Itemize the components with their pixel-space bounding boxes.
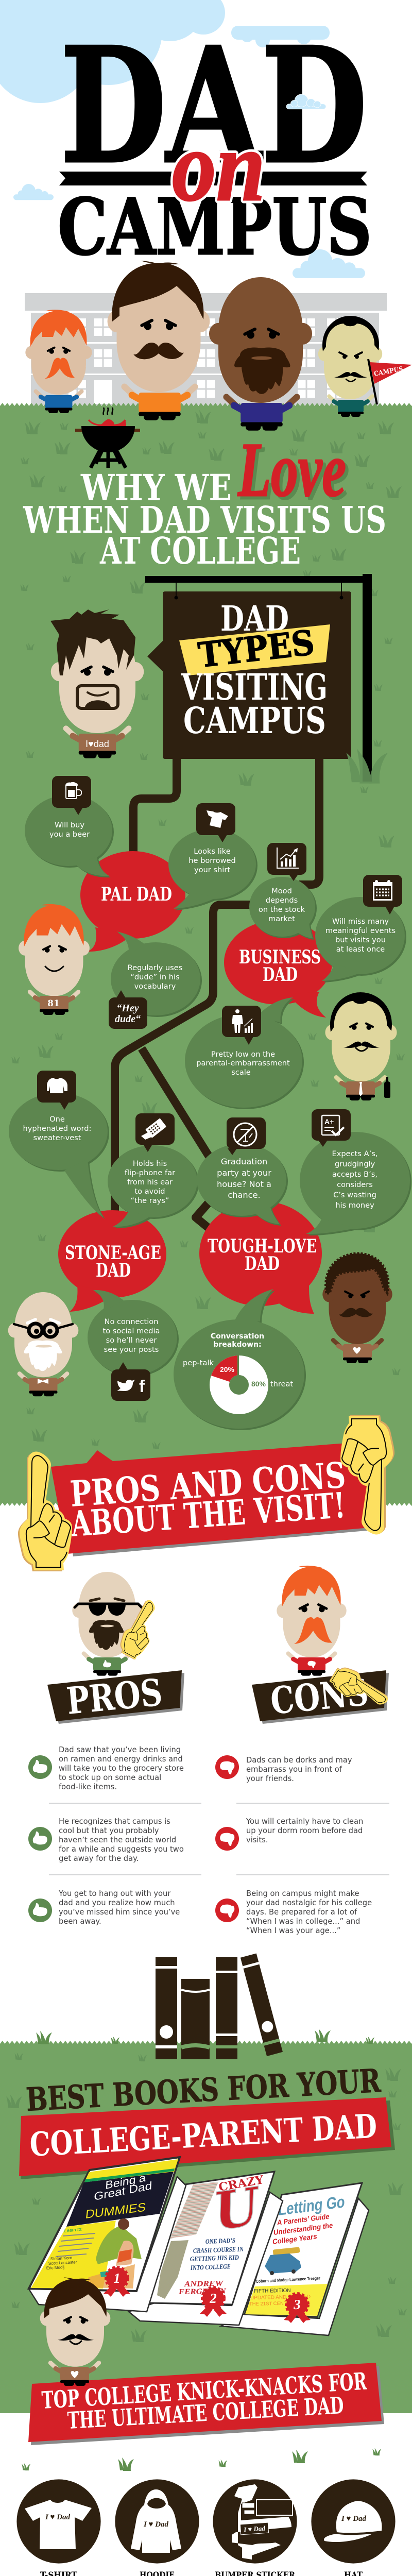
bubble: pretty low on the embarrassment scale: parental-embarrassment [196, 1059, 290, 1067]
book 1: being a great dad: Great Dad [94, 2179, 152, 2203]
pro item 2: cool but that you probably [59, 1826, 159, 1835]
bubble: will miss many meaningful events: Will miss many [332, 917, 389, 926]
panel: business dad: DAD [263, 964, 298, 986]
icon: graded paper: A+ [324, 1117, 334, 1126]
script love: Love [237, 427, 346, 513]
book covers [29, 2157, 369, 2335]
donut chart: 20% pep-talk, 80% threat [183, 1355, 293, 1404]
con item 3: “When I was in college...” and [246, 1917, 360, 1926]
bubble: conversation breakdown [174, 1289, 306, 1430]
dad: orange hair [25, 310, 92, 413]
book 2: crazy u [129, 2172, 283, 2325]
con item 3 [215, 1889, 372, 1935]
bubble: conversation breakdown: Conversation [211, 1332, 264, 1341]
bubble: no connection to social media: No connection [105, 1317, 158, 1326]
foam hand left [18, 1452, 72, 1571]
panel: pal dad [25, 776, 258, 952]
book 3: letting go: Letting Go [278, 2192, 346, 2219]
heading: why we love when dad visits us at college [23, 427, 386, 572]
bubble: will miss many meaningful events [315, 875, 406, 982]
dad: pal dad character [19, 904, 90, 1015]
bubble: regularly uses dude: vocabulary [134, 982, 176, 991]
book 2: crazy u: FERGUSON [178, 2287, 227, 2296]
knick-knack: hoodie [115, 2479, 199, 2576]
knick-knack: t-shirt [16, 2479, 101, 2576]
bubble: no connection to social media: so he’ll never [106, 1336, 157, 1345]
dad: pal dad character: 81 [47, 998, 60, 1009]
dad: business dad character [325, 992, 397, 1100]
bubble: mood depends on the stock market: depends [266, 896, 298, 905]
pro item 1: Dad saw that you’ve been living [59, 1745, 181, 1754]
pro item 3: dad and you realize how much [59, 1899, 175, 1907]
panel: tough-love dad: TOUGH-LOVE [208, 1235, 317, 1257]
pro item 2: for a while and suggests you two [59, 1845, 184, 1854]
panel: stone-age dad: DAD [96, 1260, 131, 1281]
pro item 2: get away for the day. [59, 1854, 139, 1863]
panel: business dad [185, 843, 406, 1109]
con item 3: “When I was your age...” [246, 1926, 340, 1935]
toy car [265, 2247, 301, 2275]
yellow banner [179, 624, 330, 675]
con item 2: You will certainly have to clean [246, 1817, 363, 1826]
bubble: holds flip phone: flip-phone far [125, 1168, 175, 1177]
book 1: being a great dad: Scott Lancaster [48, 2260, 77, 2266]
book 2: crazy u: CRASH COURSE IN [193, 2245, 244, 2255]
book 1: being a great dad: Learn to: [64, 2226, 83, 2233]
pro item 1 [28, 1745, 184, 1791]
bubble: holds flip phone [108, 1113, 199, 1228]
bubble: will miss many meaningful events: at least once [336, 945, 385, 954]
bubble: holds flip phone: Holds his [133, 1159, 167, 1168]
pennant: CAMPUS [373, 365, 404, 378]
bubble: will buy you a beer: Will buy [55, 821, 84, 829]
pro item 1: on ramen and energy drinks and [59, 1755, 183, 1764]
icon: no alcohol [227, 1117, 266, 1155]
script love shadow: Love [241, 430, 349, 516]
hanging sign: dad types visiting campus: TYPES [196, 622, 316, 675]
bubble: will buy you a beer [25, 776, 114, 877]
bubble: one hyphenated word sweater-vest: One [49, 1115, 65, 1124]
pro item 2 [28, 1817, 184, 1863]
pro item 3: been away. [59, 1917, 101, 1926]
pennant [368, 359, 412, 404]
dad: brown hair moustache [108, 261, 210, 420]
red speech bubble: stone-age dad [58, 1210, 166, 1312]
bubble: mood depends on the stock market: Mood [271, 887, 292, 895]
knick-knack: hat: I ♥ Dad [341, 2515, 367, 2523]
medal 3: 3 [293, 2297, 301, 2312]
grass field: books section [0, 2041, 412, 2413]
bubble: expects a's: considers [337, 1180, 373, 1189]
book 3: letting go [221, 2183, 369, 2335]
con item 1: embarrass you in front of [246, 1765, 342, 1774]
icon: calendar [363, 875, 402, 914]
donut chart: 20% pep-talk, 80% threat: 20% [220, 1365, 235, 1374]
red speech bubble: tough-love dad [199, 1201, 322, 1314]
bubble: will buy you a beer: you a beer [49, 830, 90, 839]
hanging sign: dad types visiting campus: DAD [220, 598, 289, 639]
icon: flip phone [135, 1113, 175, 1152]
con item 1 [215, 1755, 352, 1783]
book 1: being a great dad [29, 2157, 186, 2312]
medal 2 [200, 2287, 227, 2317]
dad: messy hair goatee: I♥dad [85, 739, 109, 749]
pro item 1: will take you to the grocery store [59, 1764, 184, 1773]
heading: why we love when dad visits us at college: WHY WE [80, 466, 232, 509]
book 1: being a great dad: Stefan Korn [50, 2256, 72, 2261]
icon: beer [52, 776, 91, 815]
red banner [21, 2100, 395, 2179]
book 2: crazy u: GETTING HIS KID [190, 2253, 239, 2263]
donut chart: 20% pep-talk, 80% threat: threat [270, 1380, 293, 1388]
pro item 2: haven’t seen the outside world [59, 1836, 176, 1844]
con item 2: up your dorm room before dad [246, 1826, 363, 1835]
book 2: crazy u: ANDREW [184, 2280, 224, 2289]
panel: cons [215, 1566, 392, 1935]
icon: businessman [222, 1006, 261, 1045]
knick-knack: bumper sticker: I ♥ Dad [243, 2524, 266, 2534]
book 3: letting go: Understanding the [273, 2221, 333, 2236]
icon: t-shirt [196, 803, 235, 842]
knick-knack: bumper sticker [213, 2479, 297, 2576]
icon: sweater [37, 1071, 76, 1110]
script word on, fill: on [172, 111, 265, 222]
dad: cons character [277, 1566, 392, 1717]
pro item 2: He recognizes that campus is [59, 1817, 170, 1826]
book 3: letting go: Coburn and Madge Lawrence Treeger [256, 2275, 320, 2284]
pro item 3: You get to hang out with your [58, 1889, 171, 1898]
banner: pros and cons about the visit: PROS AND CONS [69, 1454, 347, 1515]
bubble: expects a's: accepts B’s, [332, 1170, 377, 1179]
photo: father and baby [85, 2218, 142, 2289]
panel: business dad: BUSINESS [239, 946, 321, 968]
pros label: PROS [64, 1670, 164, 1723]
medal 1: 1 [113, 2270, 121, 2286]
bubble: expects a's: grudgingly [335, 1160, 375, 1168]
book 1: being a great dad: Being a [105, 2171, 146, 2192]
small cloud over D [286, 94, 326, 109]
bubble: graduation party: house? Not a [217, 1179, 271, 1189]
bubble: one hyphenated word sweater-vest [9, 1071, 109, 1219]
icon: hey dude [109, 990, 147, 1029]
bubble: pretty low on the embarrassment scale: Pretty low on the [211, 1050, 275, 1059]
icon: hey dude: dude“ [115, 1013, 141, 1025]
book 3: letting go: FIFTH EDITION [254, 2288, 291, 2294]
bubble: graduation party [197, 1117, 288, 1226]
panel: tough-love dad: DAD [245, 1253, 280, 1275]
heading: best books for your college-parent dad [19, 2062, 395, 2179]
book 3: letting go: THE 21ST CENTURY [249, 2300, 297, 2307]
con item 2 [215, 1817, 363, 1851]
book 3: letting go: College Years [272, 2232, 317, 2246]
bubble: mood depends on the stock market [249, 843, 317, 940]
con item 3: Being on campus might make [246, 1889, 359, 1898]
connector pipes [115, 757, 319, 1229]
bubble: expects a's: C’s wasting [333, 1191, 376, 1199]
book 2: crazy u: U [213, 2175, 260, 2243]
bubble: regularly uses dude [109, 931, 202, 1029]
bubble: expects a's: Expects A’s, [332, 1149, 377, 1158]
book 1: being a great dad: Eric Mooij [46, 2265, 64, 2270]
grass tufts: top field [11, 410, 405, 1449]
con item 1: Dads can be dorks and may [246, 1756, 352, 1765]
bubble: no connection to social media: to social media [103, 1327, 160, 1335]
bubble: graduation party: chance. [228, 1190, 261, 1200]
pro item 1: to stock up on some actual [59, 1773, 161, 1782]
bubble: conversation breakdown: breakdown: [213, 1341, 262, 1349]
bubble: will miss many meaningful events: but visits you [335, 936, 386, 944]
bubble: looks like he borrowed your shirt: Looks like [194, 847, 231, 856]
campus building [25, 293, 387, 405]
dad: tough-love character [322, 1253, 392, 1363]
con item 3: your dad nostalgic for his college [246, 1899, 372, 1907]
banner: top college knick-knacks [28, 2363, 384, 2445]
icon: stack of books [156, 1954, 283, 2059]
panel: pal dad: PAL DAD [101, 884, 172, 905]
bubble: looks like he borrowed your shirt: your shirt [194, 866, 230, 874]
icon: graded paper [312, 1109, 351, 1147]
banner red [51, 1443, 370, 1554]
book 1: being a great dad: DUMMIES [84, 2200, 147, 2221]
bubble: regularly uses dude: “dude” in his [130, 973, 180, 981]
bubble: looks like he borrowed your shirt: he borrowed [188, 856, 236, 865]
dad: messy hair goatee [50, 609, 144, 758]
bubble: no connection to social media: see your posts [104, 1345, 159, 1354]
medal 1 [104, 2267, 130, 2297]
medal 2: 2 [209, 2291, 217, 2306]
red speech bubble: business dad [224, 920, 332, 1018]
icon: barbecue grill [75, 408, 140, 468]
bubble: expects a's [300, 1109, 411, 1235]
bubble: graduation party: party at your [217, 1168, 271, 1178]
heading: why we love when dad visits us at college: AT COLLEGE [99, 529, 301, 572]
grass tufts: books section [6, 2029, 407, 2342]
cons label: CONS [268, 1670, 370, 1723]
dad: books section character [40, 2277, 110, 2386]
book 2: crazy u: ONE DAD’S [205, 2236, 235, 2245]
donut chart: 20% pep-talk, 80% threat: 80% [251, 1380, 266, 1388]
hanging sign: dad types visiting campus: CAMPUS [183, 699, 326, 742]
grass tufts: white section [12, 2448, 391, 2576]
dad: bald bearded [209, 277, 312, 431]
donut chart: 20% pep-talk, 80% threat: pep-talk [183, 1359, 214, 1367]
book 3: letting go: UPDATED AND REVISED [250, 2294, 311, 2301]
ribbon behind on [59, 172, 367, 185]
book 2: crazy u: CRAZY [218, 2173, 265, 2194]
medal 3 [284, 2294, 311, 2323]
con item 1: your friends. [246, 1774, 294, 1783]
bubble: no connection to social media [88, 1290, 179, 1401]
bubble: graduation party: Graduation [221, 1157, 267, 1166]
icon: twitter and facebook: f [139, 1377, 145, 1396]
sign post [145, 574, 372, 782]
bubble: holds flip phone: from his ear [127, 1178, 173, 1187]
icon: stock chart [267, 843, 306, 881]
icon: hey dude: “Hey [116, 1003, 139, 1014]
con item 3: days. Be prepared for a lot of [246, 1908, 357, 1917]
bubble: pretty low on the embarrassment scale [185, 997, 304, 1109]
pro item 1: food-like items. [59, 1783, 117, 1791]
title: DAD on CAMPUS [58, 13, 372, 273]
con item 2: visits. [246, 1836, 268, 1844]
bubble: holds flip phone: to avoid [134, 1187, 165, 1196]
bubble: holds flip phone: “the rays” [131, 1196, 169, 1205]
panel: stone-age dad [9, 1071, 199, 1401]
script word on: on [172, 111, 265, 222]
hanging sign: dad types visiting campus: VISITING [181, 666, 328, 708]
knick-knack: hat [311, 2479, 396, 2576]
panel: stone-age dad: STONE-AGE [65, 1242, 161, 1264]
banner: pros and cons about the visit [18, 1415, 394, 1571]
bubble: regularly uses dude: Regularly uses [128, 963, 182, 972]
bubble: one hyphenated word sweater-vest: hyphenated word: [23, 1124, 91, 1133]
bubble: expects a's: his money [335, 1201, 374, 1210]
bubble: will miss many meaningful events: meaningful events [325, 926, 396, 935]
panel: tough-love dad [174, 1109, 411, 1430]
bubble: pretty low on the embarrassment scale: scale [231, 1068, 251, 1077]
pro item 3 [28, 1889, 180, 1926]
bubble: mood depends on the stock market: market [268, 914, 295, 923]
book 2: crazy u: INTO COLLEGE [190, 2262, 231, 2272]
bubble: mood depends on the stock market: on the stock [259, 905, 305, 914]
sky clouds [0, 0, 365, 278]
grass field: top section [0, 403, 412, 1507]
red speech bubble: pal dad [80, 851, 185, 952]
icon: twitter and facebook [111, 1362, 150, 1401]
panel: pros [28, 1572, 201, 1926]
dad: pros character with sunglasses [72, 1572, 167, 1676]
hanging sign: dad types visiting campus [145, 574, 372, 782]
dad: stone-age character [8, 1292, 78, 1396]
pro item 3: you’ve missed him since you’ve [59, 1908, 180, 1917]
bubble: one hyphenated word sweater-vest: sweater-vest [33, 1133, 81, 1142]
banner shadow [62, 1445, 372, 1556]
foam hand right [340, 1415, 394, 1534]
dad: with pennant [318, 316, 412, 417]
knick-knack: hoodie: I ♥ Dad [143, 2520, 169, 2529]
large grass tuft [346, 749, 388, 784]
book 3: letting go: A Parents’ Guide [277, 2212, 330, 2227]
knick-knack: t-shirt: I ♥ Dad [45, 2513, 71, 2521]
bubble: looks like he borrowed your shirt [168, 803, 258, 910]
sign board [163, 591, 351, 759]
